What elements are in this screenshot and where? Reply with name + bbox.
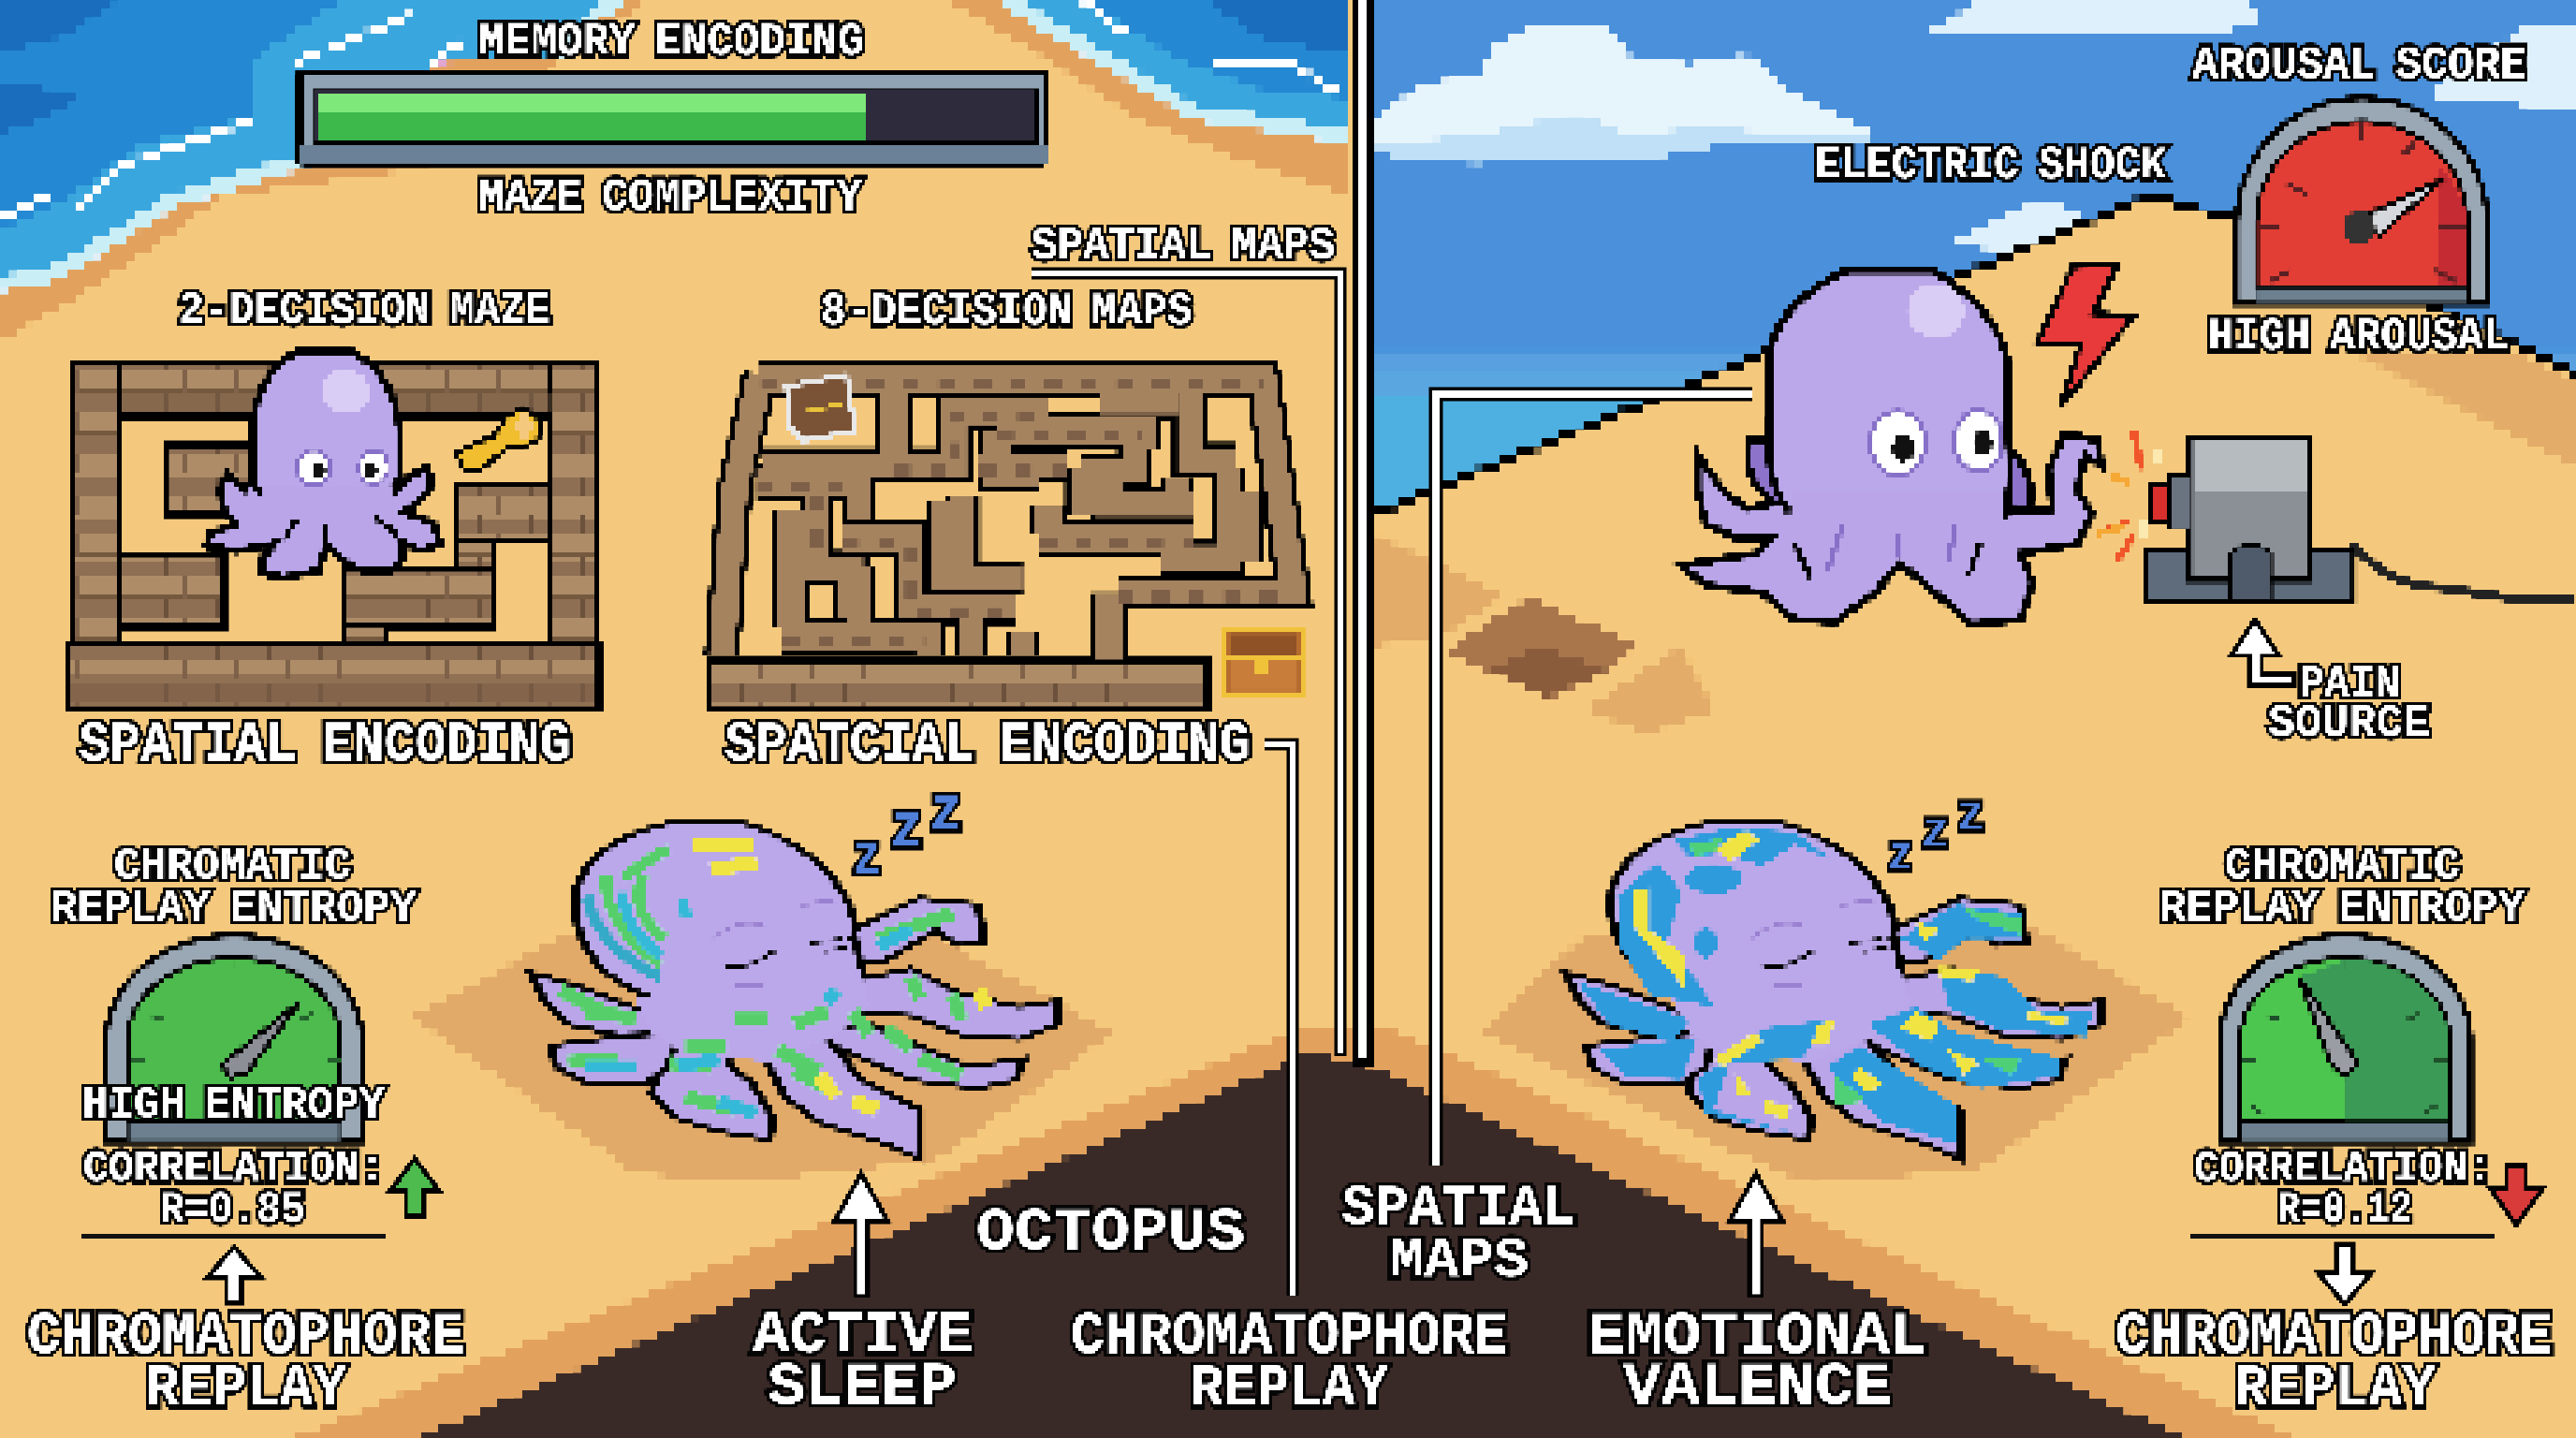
arrow: green correlation up (390, 1159, 439, 1216)
artwork layer (68, 72, 2576, 1159)
octopus: sleeping with green replay (531, 823, 1058, 1159)
icon: treasure chest (1224, 629, 1302, 696)
label: spatial encoding: SPATIAL ENCODING (79, 714, 571, 778)
label: high arousal: HIGH AROUSAL (2208, 311, 2509, 363)
label: correlation right (2194, 1145, 2493, 1236)
icon: sleep z's left: Z (930, 788, 960, 845)
label: chromatophore replay left: REPLAY (146, 1357, 347, 1424)
blue and yellow patches (1576, 828, 2093, 1144)
label: correlation left: R=0.85 (160, 1186, 305, 1236)
clouds (1375, 22, 1867, 164)
label: emotional valence: VALENCE (1623, 1355, 1892, 1422)
arrow: pain source (2232, 620, 2293, 685)
octopus: sleeping with blue patchy replay (1566, 823, 2100, 1159)
hill outline (1375, 196, 2576, 514)
maze walls (722, 374, 1294, 661)
label: maze complexity: MAZE COMPLEXITY (478, 171, 863, 224)
hill shading and pits (1375, 353, 2576, 734)
label: chromatophore replay right (2115, 1304, 2553, 1424)
bar fill (316, 92, 864, 139)
arrow: red correlation down (2491, 1166, 2542, 1225)
arrow: chromatophore replay down (2319, 1245, 2371, 1304)
label: electric shock: ELECTRIC SHOCK (1815, 139, 2167, 192)
label: spatial maps top: SPATIAL MAPS (1032, 220, 1335, 272)
label: correlation left: CORRELATION: (83, 1145, 385, 1195)
label: emotional valence: EMOTIONAL (1588, 1304, 1927, 1372)
memory encoding progress bar (300, 72, 1046, 163)
deep water (0, 0, 1347, 230)
panel: complex maze (709, 374, 1302, 708)
label: chromatic replay entropy left: REPLAY ENTROPY (51, 885, 417, 934)
label: spatial maps center: MAPS (1389, 1230, 1529, 1294)
label: chromatophore replay left (27, 1304, 464, 1424)
correlation rule right (2190, 1234, 2495, 1239)
label: emotional valence (1588, 1304, 1927, 1422)
cable (2351, 544, 2576, 600)
label: chromatophore replay right: CHROMATOPHORE (2115, 1304, 2553, 1372)
needle (222, 1001, 300, 1078)
icon: sleep z's right (1889, 796, 1983, 881)
label: chromatophore replay left: CHROMATOPHORE (27, 1304, 464, 1372)
label: chromatic replay entropy right (2159, 843, 2525, 934)
arrow: to emotional valence (1730, 1174, 1782, 1296)
octopus: maze explorer (206, 350, 440, 578)
label: arousal score: AROUSAL SCORE (2192, 39, 2526, 92)
panel: sky, right (1375, 0, 2576, 768)
icon: locked box (786, 374, 855, 441)
center divider (1353, 0, 1374, 1067)
label: pain source: SOURCE (2268, 697, 2430, 750)
correlation rule left (81, 1234, 386, 1239)
label: active sleep: SLEEP (768, 1355, 957, 1422)
label: chromatophore replay right: REPLAY (2234, 1357, 2437, 1424)
label: chromatophore replay center: REPLAY (1191, 1357, 1389, 1424)
label: correlation right: R=0.12 (2277, 1186, 2412, 1236)
label: chromatic replay entropy left: CHROMATIC (114, 843, 351, 892)
sparks (2097, 431, 2158, 561)
icon: sleep z's right: Z (1958, 796, 1983, 843)
horizon sea (1375, 350, 2576, 517)
red button (2170, 475, 2190, 529)
machine box (2190, 438, 2311, 580)
icon: sleep z's right: Z (1889, 839, 1911, 881)
foam (0, 0, 1347, 284)
label: chromatophore replay center (1071, 1304, 1508, 1424)
panel: beach sea, left (0, 0, 1347, 340)
title: memory encoding: MEMORY ENCODING (478, 16, 864, 68)
green replay accents (1690, 838, 2021, 1106)
octopus: shocked (1682, 271, 2101, 624)
label: pain source: PAIN (2299, 658, 2400, 711)
connector: spatial maps left (1032, 273, 1340, 1056)
icon: golden key (456, 406, 541, 473)
arrow: to active sleep (835, 1174, 887, 1296)
label: chromatophore replay center: CHROMATOPHORE (1071, 1304, 1508, 1372)
connector: spatial maps right (1436, 394, 1752, 1166)
label: 2-decision maze: 2-DECISION MAZE (179, 285, 550, 337)
icon: sleep z's left: Z (854, 837, 880, 886)
sea water (0, 0, 1347, 289)
raised inner tentacles (1748, 438, 2030, 509)
tentacles (1682, 433, 2101, 624)
gauge: high entropy (106, 935, 362, 1142)
maze walls (68, 362, 599, 708)
label: chromatic replay entropy right: REPLAY ENTROPY (2159, 885, 2525, 934)
connector: spatcial encoding (1265, 744, 1293, 1296)
bar frame (300, 72, 1046, 163)
label: spatial maps center: SPATIAL (1341, 1178, 1576, 1241)
sand shadow: left sleeper (410, 934, 1114, 1181)
needle (2299, 977, 2358, 1078)
label: active sleep (753, 1303, 973, 1422)
needle (2360, 179, 2444, 235)
icon: sleep z's right: Z (1923, 813, 1947, 859)
icon: sleep z's left (854, 788, 960, 886)
arrow: chromatophore replay up (208, 1247, 260, 1302)
bar track (314, 89, 1035, 142)
sand hill (1375, 196, 2576, 768)
label: correlation right: CORRELATION: (2194, 1145, 2493, 1195)
icon: lightning bolt (2037, 264, 2133, 406)
wet sand shoreline (0, 0, 1347, 340)
label: spatial maps center (1341, 1178, 1576, 1294)
icon: sleep z's left: Z (891, 805, 921, 862)
yellow replay accents (1633, 829, 2077, 1118)
head (1768, 271, 2010, 509)
green and yellow chromatophore stripes (560, 844, 987, 1114)
panel: simple maze (68, 350, 599, 708)
gauge: arousal score (2237, 98, 2487, 303)
label: correlation left (83, 1145, 385, 1236)
label: chromatic replay entropy left (51, 843, 417, 934)
gauge: low entropy (2219, 935, 2471, 1142)
label: active sleep: ACTIVE (753, 1303, 973, 1371)
machine base (2145, 549, 2354, 600)
eyes (1870, 411, 1925, 475)
label: 8-decision maps: 8-DECISION MAPS (821, 286, 1193, 338)
label: spatcial encoding: SPATCIAL ENCODING (724, 714, 1251, 778)
label: octopus: OCTOPUS (976, 1200, 1245, 1268)
label: high entropy: HIGH ENTROPY (82, 1081, 386, 1131)
dark mountain and sand bands (292, 1024, 2295, 1438)
label: pain source (2268, 658, 2430, 750)
label: chromatic replay entropy right: CHROMATIC (2225, 843, 2460, 892)
sky (1375, 0, 2576, 353)
sand shadow: right sleeper (1484, 930, 2190, 1184)
icon: shock machine (2145, 438, 2576, 600)
